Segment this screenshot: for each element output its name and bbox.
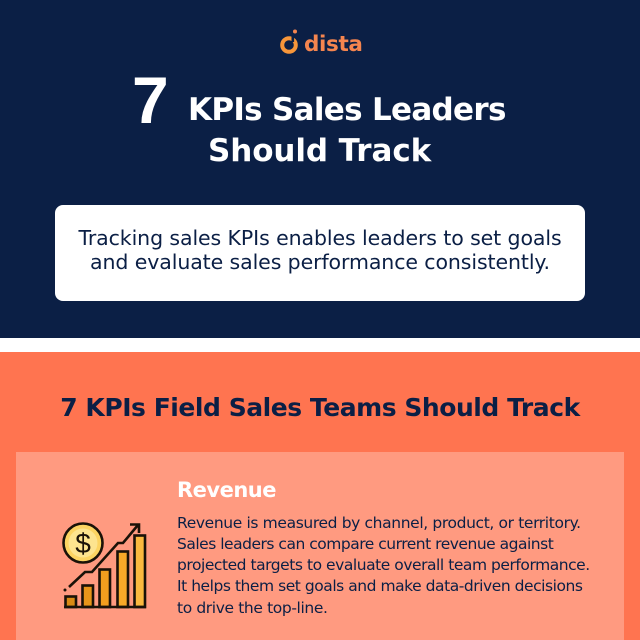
- revenue body text: Sales leaders can compare current revenue against: [177, 535, 553, 553]
- logo wordmark: dista: [304, 32, 363, 56]
- icon: revenue growth chart: [62, 522, 146, 608]
- revenue heading: Revenue: [177, 478, 276, 502]
- title line 2: Should Track: [208, 133, 431, 169]
- revenue body text: It helps them set goals and make data-driven decisions: [177, 577, 582, 595]
- revenue body text: to drive the top-line.: [177, 599, 328, 617]
- intro text: Tracking sales KPIs enables leaders to set goals: [78, 226, 562, 250]
- header band: [0, 0, 640, 338]
- title line 1: KPIs Sales Leaders: [188, 92, 506, 128]
- intro card: [55, 205, 585, 301]
- orange section: [0, 352, 640, 640]
- icon: dista logo mark: [280, 30, 298, 54]
- revenue body text: [177, 514, 590, 617]
- logo: [280, 30, 363, 56]
- section heading: 7 KPIs Field Sales Teams Should Track: [60, 393, 580, 422]
- intro text: and evaluate sales performance consistently.: [90, 250, 550, 274]
- title number: 7: [132, 63, 169, 137]
- revenue body text: Revenue is measured by channel, product, or territory.: [177, 514, 581, 532]
- revenue body text: projected targets to evaluate overall team performance.: [177, 556, 590, 574]
- intro text: [78, 226, 562, 274]
- dollar sign: $: [75, 528, 91, 559]
- panel: revenue: [16, 452, 624, 640]
